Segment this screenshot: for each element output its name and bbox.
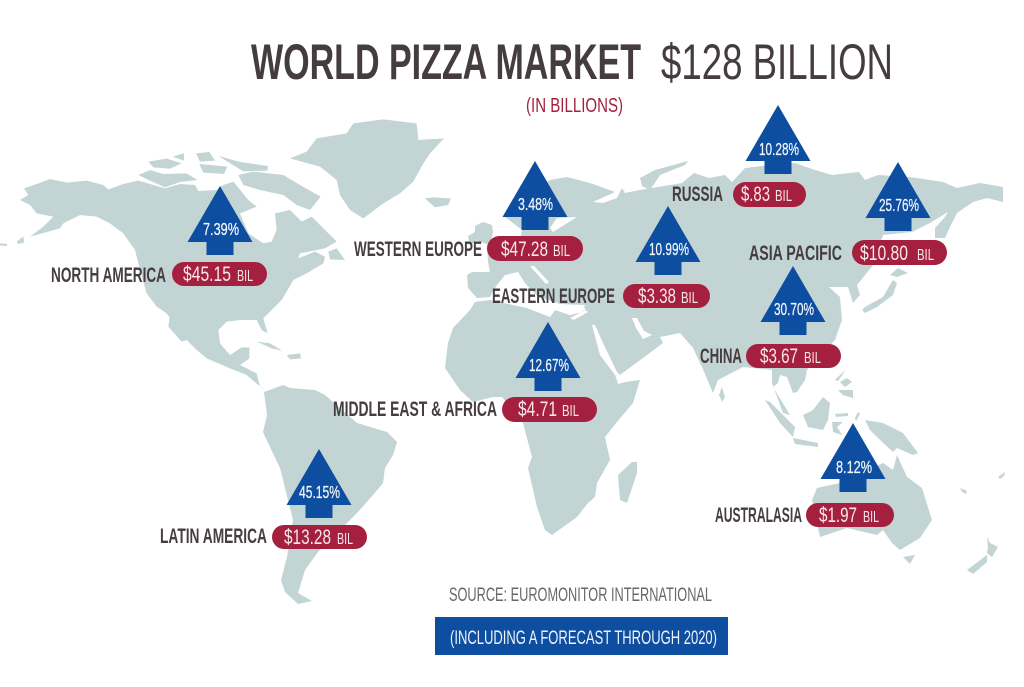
region: china (700, 266, 841, 368)
region: eastern europe: BIL (681, 290, 698, 307)
region: asia pacific: 25.76% (879, 195, 919, 215)
region: australasia: $1.97 (819, 504, 857, 527)
region: western europe: $47.28 (501, 238, 548, 261)
region: asia pacific (749, 162, 947, 265)
greenland (290, 119, 444, 218)
italy (520, 268, 547, 297)
region: eastern europe: EASTERN EUROPE (492, 285, 615, 308)
region: russia: RUSSIA (672, 183, 723, 206)
region: middle east and africa: BIL (562, 403, 579, 420)
region: china: BIL (804, 350, 821, 367)
region: western europe (354, 161, 583, 261)
world map (0, 119, 1005, 604)
eurasia (467, 163, 1003, 415)
madagascar (618, 462, 637, 503)
britain (475, 222, 493, 245)
japan (862, 280, 897, 313)
region: latin america: LATIN AMERICA (160, 525, 267, 548)
region: asia pacific: ASIA PACIFIC (749, 242, 842, 265)
region: middle east and africa: 12.67% (529, 355, 569, 375)
region: australasia: 8.12% (836, 457, 872, 477)
australia (812, 455, 932, 550)
region: western europe: WESTERN EUROPE (354, 238, 482, 261)
region: asia pacific: BIL (917, 247, 934, 264)
tasmania (903, 555, 915, 564)
seas (490, 217, 652, 384)
title: $128 BILLION (661, 34, 893, 90)
forecast banner: (INCLUDING A FORECAST THROUGH 2020) (450, 628, 717, 649)
iceland (425, 197, 451, 207)
region: western europe: 3.48% (518, 194, 553, 214)
region: middle east and africa: $4.71 (518, 398, 557, 421)
region: eastern europe (492, 206, 710, 308)
region: latin america: 45.15% (299, 482, 340, 502)
africa (445, 300, 640, 535)
region: middle east and africa (333, 322, 597, 422)
ireland (468, 232, 477, 246)
region: north america: NORTH AMERICA (51, 264, 166, 287)
region: china: CHINA (700, 345, 742, 368)
novaya zemlya (640, 161, 688, 190)
region: australasia: BIL (863, 509, 879, 526)
region: north america: 7.39% (203, 219, 239, 239)
forecast banner (435, 617, 728, 655)
region: western europe: BIL (553, 243, 570, 260)
north america (0, 119, 451, 392)
region: middle east and africa: MIDDLE EAST & AFRICA (333, 398, 497, 421)
region: eastern europe: 10.99% (649, 239, 689, 259)
region: russia (672, 105, 810, 207)
region: north america: $45.15 (183, 263, 231, 286)
region: north america: BIL (237, 268, 253, 285)
region: latin america (160, 449, 367, 549)
title: WORLD PIZZA MARKET (251, 34, 641, 90)
region: australasia (715, 423, 894, 527)
southeast asia islands (719, 387, 725, 402)
south america (263, 385, 397, 604)
region: russia: 10.28% (759, 139, 799, 159)
region: north america (51, 186, 267, 287)
region: latin america: BIL (337, 531, 353, 548)
region: china: $3.67 (760, 345, 798, 368)
subtitle: (IN BILLIONS) (526, 95, 623, 117)
new guinea (865, 420, 918, 455)
region: eastern europe: $3.38 (638, 285, 676, 308)
region: china: 30.70% (774, 299, 814, 319)
region: russia: BIL (775, 188, 792, 205)
region: latin america: $13.28 (284, 526, 331, 549)
region: australasia: AUSTRALASIA (715, 504, 802, 527)
region: asia pacific: $10.80 (860, 242, 908, 265)
source note: SOURCE: EUROMONITOR INTERNATIONAL (449, 585, 712, 606)
new zealand (987, 537, 998, 557)
region: russia: $.83 (741, 183, 770, 206)
